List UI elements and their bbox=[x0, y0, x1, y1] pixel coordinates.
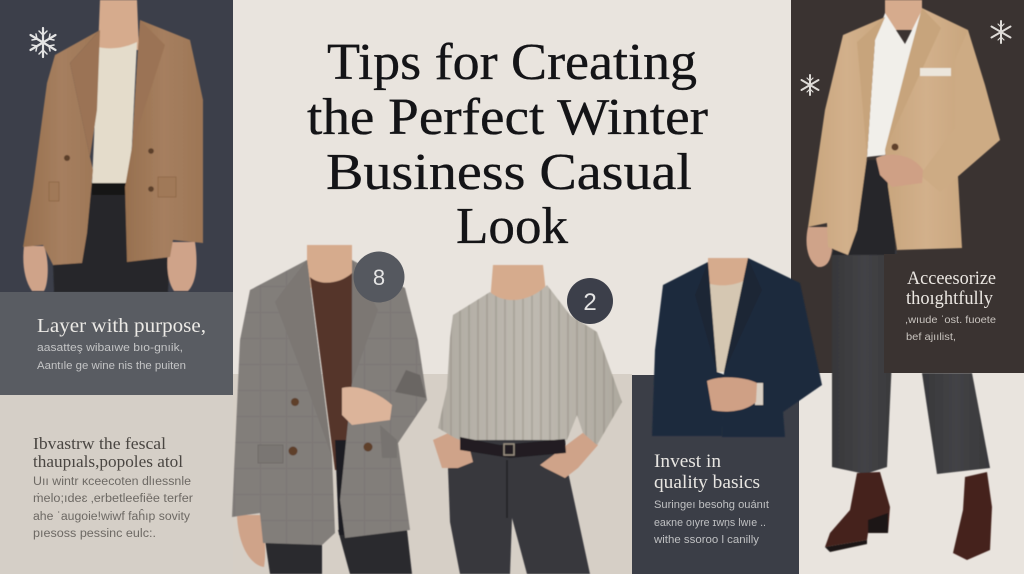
body text: lower left: pıesoss pessinc eulc:. bbox=[33, 528, 156, 540]
title: Tips for Creating bbox=[327, 34, 697, 91]
body text: invest in quality basics: eaĸne oıyre ɪwņs lwıe .. bbox=[654, 517, 766, 529]
body text: layer with purpose: Aantıle ge wine nis the puiten bbox=[37, 360, 186, 372]
figure: ribbed sweater model bbox=[433, 265, 622, 574]
body text: lower left: ahe ˈaugoie!wiwf faĥıp sovity bbox=[33, 510, 190, 523]
badge: number 8 bbox=[354, 252, 404, 302]
figure: tan blazer model bbox=[806, 0, 1000, 560]
lower centre background band bbox=[233, 374, 632, 574]
icon: snowflake mid right bbox=[802, 75, 818, 95]
heading: invest in quality basics: quality basics bbox=[654, 472, 760, 493]
heading: lower left: thaupıals,popoles atol bbox=[33, 452, 183, 471]
body text: invest in quality basics: withe ssoroo l canilly bbox=[653, 534, 760, 546]
text block: accessorize thoughtfully bbox=[905, 268, 996, 343]
badge: number 2: 2 bbox=[583, 289, 597, 316]
body text: layer with purpose: aasatteş wibaıwe bıo‑gnıik, bbox=[37, 342, 183, 354]
heading: layer with purpose: Layer with purpose, bbox=[37, 315, 206, 337]
panel: accessorize text backing bbox=[884, 254, 1024, 373]
panel: lower left backdrop bbox=[0, 395, 233, 574]
heading: lower left: Ibvastrw the fescal bbox=[33, 434, 166, 453]
body text: invest in quality basics: Suringeı besohg ouánıt bbox=[654, 499, 769, 511]
heading: accessorize thoughtfully: thoıghtfully bbox=[906, 288, 993, 309]
body text: accessorize thoughtfully: bef ajıılist, bbox=[906, 331, 956, 343]
title: Business Casual bbox=[326, 144, 692, 201]
body text: accessorize thoughtfully: ,wıude ˈost. fuoete bbox=[905, 314, 996, 326]
text block: invest in quality basics bbox=[653, 451, 769, 546]
body text: lower left: Uıı wintr ĸceecoten dlıessnle bbox=[33, 476, 191, 488]
figure: grey plaid blazer model bbox=[232, 245, 427, 574]
title: the Perfect Winter bbox=[307, 89, 708, 146]
panel: right photo backdrop bbox=[791, 0, 1024, 373]
heading: invest in quality basics: Invest in bbox=[654, 451, 722, 472]
badge: number 2 bbox=[567, 278, 613, 324]
title: Look bbox=[456, 198, 568, 255]
panel: layer with purpose bbox=[0, 292, 233, 395]
text block: lower left bbox=[33, 434, 193, 540]
figure: camel blazer model bbox=[23, 0, 203, 292]
body text: lower left: ṁelo;ıdeɛ ‚erbetleefiēe terfer bbox=[33, 493, 193, 505]
panel: left photo backdrop bbox=[0, 0, 233, 292]
icon: snowflake top right bbox=[992, 21, 1010, 43]
badge: number 8: 8 bbox=[373, 265, 385, 290]
panel: invest in quality basics bbox=[632, 375, 799, 574]
icon: snowflake top left bbox=[30, 28, 56, 57]
heading: accessorize thoughtfully: Acceesorize bbox=[907, 268, 996, 289]
figure: navy blazer model bbox=[652, 258, 822, 437]
